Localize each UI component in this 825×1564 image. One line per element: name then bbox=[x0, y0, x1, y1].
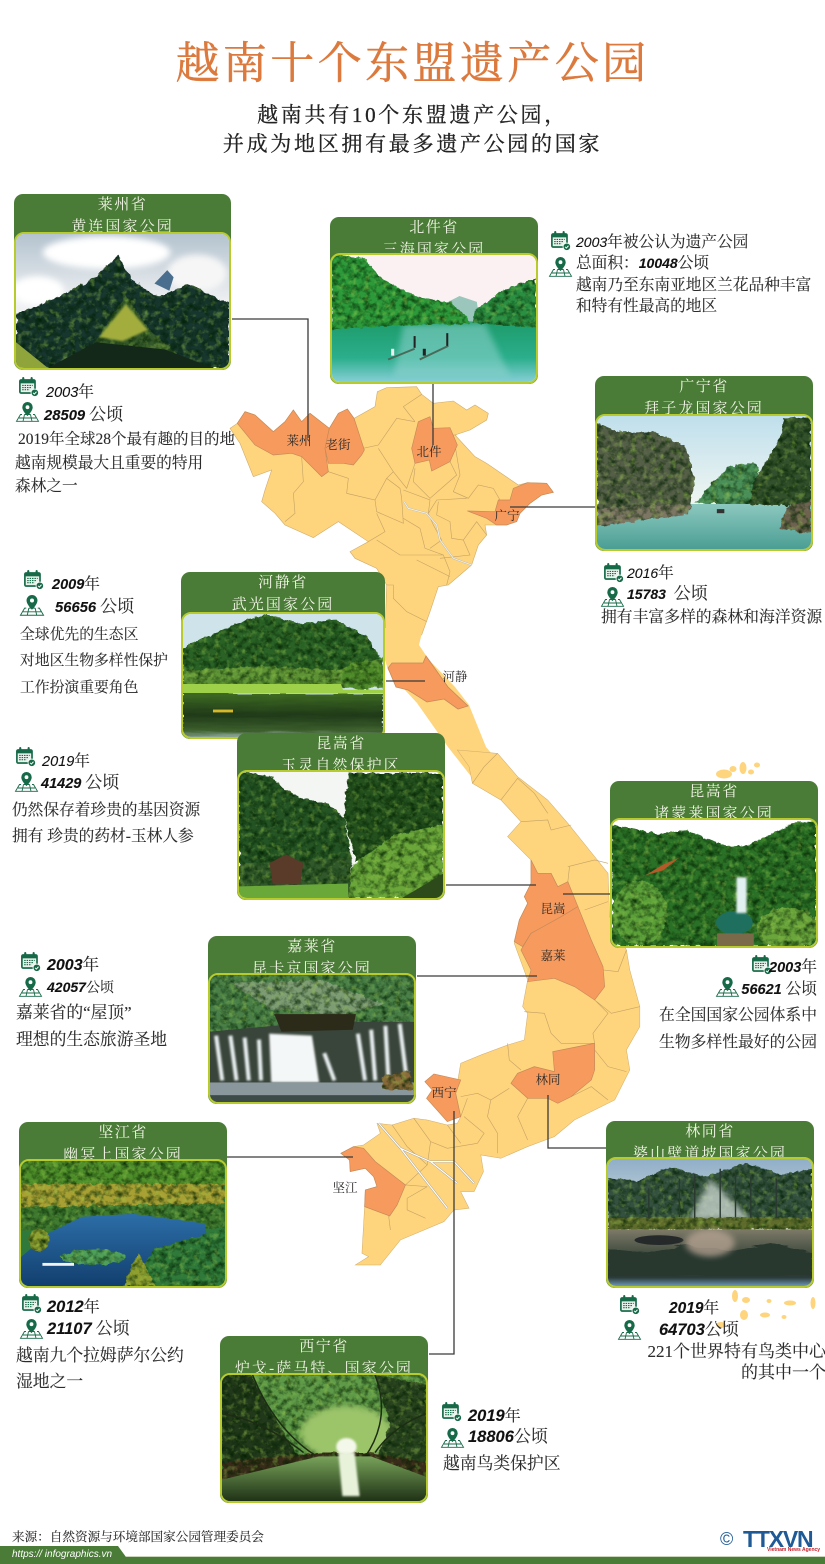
website: https:// infographics.vn bbox=[12, 1549, 112, 1560]
map labels: 嘉莱 bbox=[540, 949, 566, 963]
panel: Quang Ninh card: 拜子龙国家公园 bbox=[644, 401, 764, 417]
panel: Lai Chau card: 黄连国家公园 bbox=[71, 219, 174, 235]
panel: Bidoup Nui Ba card bbox=[606, 1121, 814, 1288]
panel: Kon Ka Kinh card: 嘉莱省 bbox=[287, 939, 337, 955]
info: Kon Ka Kinh bbox=[16, 952, 167, 1049]
icon: calendar bbox=[19, 377, 38, 396]
info: Kon Ka Kinh: 2003年 bbox=[47, 955, 99, 974]
info: Bidoup Nui Ba: 64703公顷 bbox=[659, 1320, 739, 1339]
logo: TTXVN: TTXVN bbox=[743, 1526, 812, 1552]
map: highlighted provinces bbox=[237, 409, 605, 1216]
panel: Kon Ka Kinh card: 昆卡京国家公园 bbox=[252, 961, 372, 977]
title: 越南十个东盟遗产公园 bbox=[176, 39, 650, 88]
subtitle: 越南共有10个东盟遗产公园， bbox=[257, 103, 568, 127]
subtitle bbox=[223, 103, 602, 156]
info: Lo Go Xa Mat bbox=[440, 1402, 560, 1473]
info: Chu Mom Ray: 2003年 bbox=[769, 959, 817, 976]
info: Lo Go Xa Mat: 18806公顷 bbox=[468, 1427, 548, 1446]
icon: location bbox=[20, 595, 44, 616]
info: Quang Ninh: 拥有丰富多样的森林和海洋资源 bbox=[601, 609, 822, 626]
info: Lai Chau: 森林之一 bbox=[15, 478, 78, 495]
logo: TTXVN: Vietnam News Agency bbox=[767, 1547, 820, 1553]
info: Ha Tinh: 工作扮演重要角色 bbox=[20, 680, 138, 696]
info: Ngoc Linh: 2019年 bbox=[42, 753, 90, 770]
panel: U Minh Thuong card bbox=[19, 1122, 227, 1288]
icon: location bbox=[440, 1428, 464, 1448]
info: Ngoc Linh: 仍然保存着珍贵的基因资源 bbox=[12, 802, 200, 819]
icon: calendar bbox=[24, 570, 44, 590]
icon: location bbox=[548, 257, 572, 277]
info: Quang Ninh bbox=[600, 563, 822, 626]
info: Bac Kan bbox=[548, 231, 811, 315]
info: Ngoc Linh: 拥有 珍贵的药材-玉林人参 bbox=[12, 828, 194, 845]
panel: Chu Mom Ray card: 诸蒙莱国家公园 bbox=[654, 806, 774, 822]
icon: calendar bbox=[752, 955, 771, 974]
icon: calendar bbox=[442, 1402, 462, 1422]
info: Ha Tinh bbox=[20, 570, 168, 696]
panel: Bac Kan card: 三海国家公园 bbox=[383, 242, 485, 258]
info: Quang Ninh: 2016年 bbox=[627, 565, 674, 582]
icon: location bbox=[18, 977, 42, 997]
info: Ha Tinh: 全球优先的生态区 bbox=[20, 627, 138, 643]
panel: Quang Ninh card bbox=[595, 376, 813, 551]
info: Kon Ka Kinh: 42057公顷 bbox=[47, 979, 114, 996]
info: Kon Ka Kinh: 嘉莱省的“屋顶” bbox=[16, 1003, 132, 1022]
panel: Lo Go Xa Mat card bbox=[220, 1336, 428, 1503]
info: Lai Chau: 2003年 bbox=[46, 384, 94, 401]
panel: U Minh Thuong card: 坚江省 bbox=[98, 1125, 148, 1141]
icon: calendar bbox=[604, 563, 624, 582]
panel: Kon Tum Ngoc Linh card: 玉灵自然保护区 bbox=[281, 758, 401, 774]
photo: forest and lake bbox=[181, 612, 385, 739]
panel: Bidoup Nui Ba card: 婆山壁道坡国家公园 bbox=[633, 1146, 787, 1162]
panel: Kon Tum Ngoc Linh card bbox=[237, 733, 445, 900]
icon: location bbox=[20, 1319, 44, 1339]
photo: mangrove tunnel bbox=[220, 1373, 428, 1503]
panel: Lo Go Xa Mat card: 西宁省 bbox=[299, 1339, 349, 1355]
info: Bac Kan: 和特有性最高的地区 bbox=[576, 298, 717, 315]
map: north-central land bbox=[385, 628, 497, 775]
footer bar bbox=[0, 1546, 825, 1564]
photo: forest slope bbox=[237, 770, 445, 900]
map: Paracel islands bbox=[716, 762, 760, 778]
info: Bac Kan: 2003年被公认为遗产公园 bbox=[576, 234, 748, 251]
logo: TTXVN bbox=[720, 1526, 820, 1553]
panel: Quang Ninh card: 广宁省 bbox=[679, 379, 729, 395]
info: U Minh Thuong: 湿地之一 bbox=[16, 1372, 83, 1391]
map labels: 广宁 bbox=[494, 509, 520, 523]
panel: Ha Tinh card bbox=[181, 572, 385, 739]
panel: Lo Go Xa Mat card: 炉戈-萨马特、国家公园 bbox=[235, 1361, 413, 1377]
panel: Lai Chau card bbox=[14, 194, 231, 370]
map: northern land bbox=[230, 387, 553, 635]
panel: U Minh Thuong card: 幽冥上国家公园 bbox=[63, 1147, 183, 1163]
panel: Kon Tum Ngoc Linh card: 昆嵩省 bbox=[316, 736, 366, 752]
icon: location bbox=[16, 402, 40, 422]
map labels: 北件 bbox=[416, 445, 442, 459]
panel: Chu Mom Ray card: 昆嵩省 bbox=[689, 784, 739, 800]
panel: Bac Kan card bbox=[330, 217, 538, 384]
panel: Kon Ka Kinh card bbox=[208, 936, 416, 1104]
info: Lo Go Xa Mat: 2019年 bbox=[468, 1407, 521, 1425]
info: Kon Ka Kinh: 理想的生态旅游圣地 bbox=[16, 1030, 167, 1049]
photo: mountain peak bbox=[14, 232, 231, 370]
info: Lai Chau: 28509 公顷 bbox=[44, 405, 123, 424]
info: Lai Chau bbox=[15, 377, 235, 495]
icon: location bbox=[618, 1320, 642, 1340]
map labels: 林同 bbox=[535, 1073, 561, 1087]
subtitle: 并成为地区拥有最多遗产公园的国家 bbox=[223, 132, 602, 156]
panel: Lai Chau card: 莱州省 bbox=[98, 197, 147, 213]
info: Bidoup Nui Ba: 2019年 bbox=[669, 1300, 719, 1317]
map labels: 西宁 bbox=[431, 1086, 457, 1100]
info: Bidoup Nui Ba: 的其中一个 bbox=[741, 1363, 825, 1382]
panel: Ha Tinh card: 武光国家公园 bbox=[232, 597, 334, 613]
photo: karst bay bbox=[595, 414, 813, 551]
info: Ha Tinh: 对地区生物多样性保护 bbox=[20, 653, 168, 669]
info: Lo Go Xa Mat: 越南鸟类保护区 bbox=[443, 1454, 560, 1473]
map labels: 莱州 bbox=[286, 434, 312, 448]
map labels: 老街 bbox=[325, 438, 351, 452]
panel: Bidoup Nui Ba card: 林同省 bbox=[685, 1124, 735, 1140]
info: U Minh Thuong: 21107 公顷 bbox=[47, 1319, 130, 1338]
map labels: 坚江 bbox=[332, 1181, 358, 1195]
info: Chu Mom Ray: 56621 公顷 bbox=[741, 981, 817, 998]
info: Chu Mom Ray: 生物多样性最好的公园 bbox=[659, 1034, 817, 1051]
info: Bidoup Nui Ba bbox=[618, 1295, 825, 1382]
icon: calendar bbox=[16, 747, 36, 766]
panel: Chu Mom Ray card bbox=[610, 781, 818, 948]
map: central and southern land bbox=[341, 750, 640, 1265]
photo: waterfall in forest bbox=[610, 818, 818, 948]
icon: calendar bbox=[22, 1294, 42, 1314]
logo: TTXVN: © bbox=[720, 1529, 733, 1549]
icon: location bbox=[600, 587, 624, 607]
info: Ngoc Linh bbox=[12, 747, 200, 845]
info: Ngoc Linh: 41429 公顷 bbox=[41, 773, 119, 792]
info: Lai Chau: 越南规模最大且重要的特用 bbox=[15, 455, 203, 472]
connector lines bbox=[227, 319, 610, 1354]
map: Spratly islands bbox=[716, 1290, 816, 1328]
icon: calendar bbox=[620, 1295, 640, 1314]
photo: green lake bbox=[330, 253, 538, 384]
info: Chu Mom Ray: 在全国国家公园体系中 bbox=[659, 1007, 817, 1024]
info: Bac Kan: 越南乃至东南亚地区兰花品种丰富 bbox=[576, 277, 811, 294]
icon: calendar bbox=[551, 231, 570, 250]
icon: location bbox=[716, 977, 740, 997]
info: Ha Tinh: 56656 公顷 bbox=[55, 597, 134, 616]
photo: pine forest reflection bbox=[606, 1157, 814, 1288]
photo: wetland bbox=[19, 1159, 227, 1288]
photo: cascade bbox=[208, 973, 416, 1104]
source note: 来源：自然资源与环境部国家公园管理委员会 bbox=[12, 1530, 264, 1544]
info: Quang Ninh: 15783 公顷 bbox=[627, 584, 708, 603]
panel: Ha Tinh card: 河静省 bbox=[258, 575, 308, 591]
icon: calendar bbox=[21, 952, 40, 972]
icon: location bbox=[14, 772, 38, 792]
info: Lai Chau: 2019年全球28个最有趣的目的地 bbox=[18, 431, 235, 448]
map labels: 河静 bbox=[442, 670, 468, 684]
info: Ha Tinh: 2009年 bbox=[52, 576, 100, 593]
panel: Bac Kan card: 北件省 bbox=[409, 220, 459, 236]
info: Chu Mom Ray bbox=[659, 955, 817, 1051]
info: U Minh Thuong: 2012年 bbox=[47, 1298, 100, 1316]
info: Bidoup Nui Ba: 221个世界特有鸟类中心 bbox=[648, 1342, 825, 1361]
info: Bac Kan: 总面积：10048公顷 bbox=[576, 255, 709, 272]
info: U Minh Thuong bbox=[16, 1294, 184, 1391]
map labels: 昆嵩 bbox=[540, 902, 566, 916]
info: U Minh Thuong: 越南九个拉姆萨尔公约 bbox=[16, 1346, 184, 1365]
